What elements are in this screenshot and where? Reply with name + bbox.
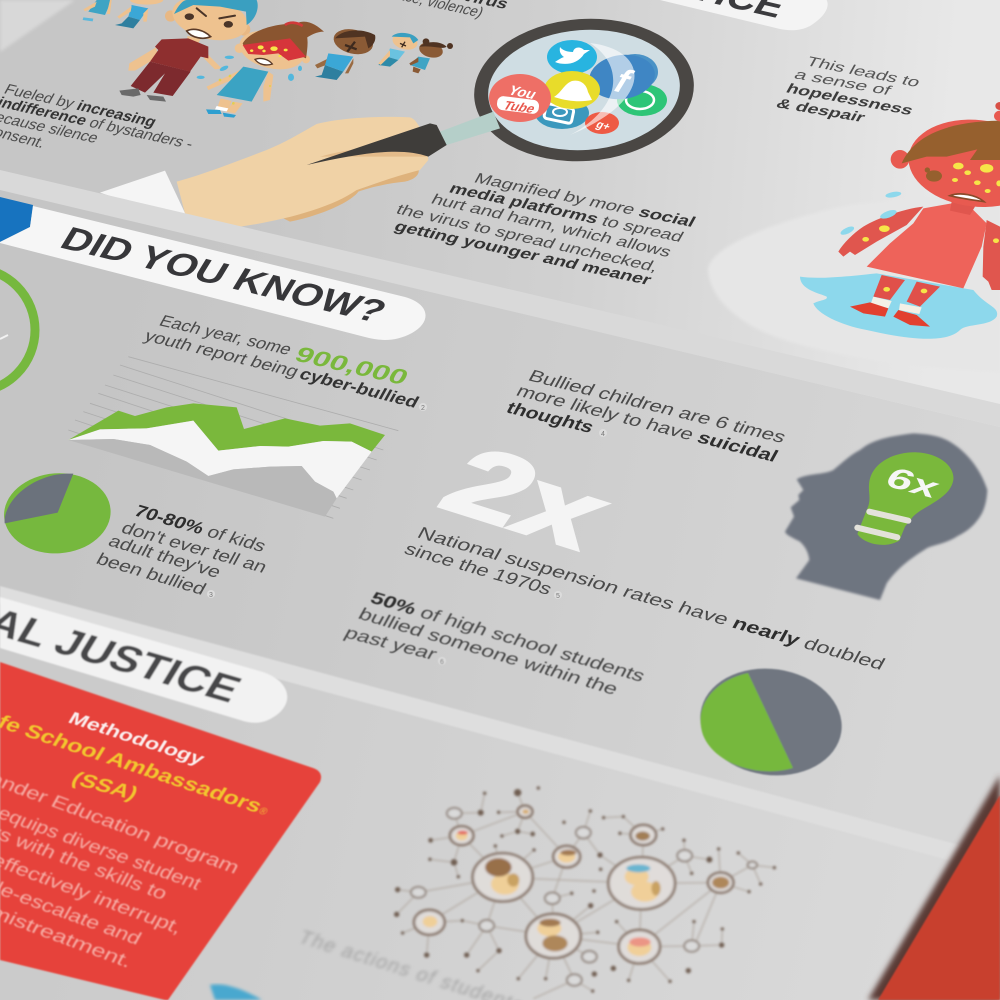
text: suspension rates [401, 523, 889, 673]
icon: light bulb [857, 452, 953, 545]
text: 70-80% of kids: don't ever tell an [118, 518, 271, 577]
text: magnified by social media [391, 170, 699, 288]
big number: 2x: 2x [422, 427, 632, 569]
icon: twitter [547, 40, 597, 74]
heading: did you know [0, 197, 426, 340]
text: 900,000 cyber-bullied [141, 312, 427, 412]
heading pill [0, 206, 426, 340]
heading: social justice (lower) [0, 570, 287, 723]
text: 50% of high school students: 50% of high school students [367, 588, 649, 685]
text: 50% of high school students: past year [341, 623, 441, 664]
text: 70-80% of kids [93, 502, 271, 599]
text: suicidal thoughts: 4 [601, 431, 605, 438]
label: 6x: 6x [879, 462, 947, 505]
chart: area chart [68, 357, 398, 518]
icon: magnifying glass with social media logos [469, 11, 699, 169]
icon: head with 6x light bulb [785, 433, 987, 600]
small child with buns [409, 38, 453, 73]
text: fueled by indifference: indifference of bystanders - [0, 95, 196, 152]
chart: green ring [0, 268, 35, 392]
text: hopelessness and despair: hopelessness [783, 81, 916, 118]
icon: snapchat [544, 71, 600, 109]
text: 900,000 cyber-bullied: 900,000 [290, 342, 413, 390]
social media halo shape behind sad girl [708, 190, 1000, 372]
illustration: sad red girl in puddle [800, 102, 1000, 339]
text: magnified by social media: the virus to spread unchecked, [393, 201, 661, 275]
chart: 50% pie [693, 660, 849, 784]
text: fueled by indifference: Fueled by increasing [1, 81, 159, 130]
text: hopelessness and despair [773, 54, 923, 125]
text: hopelessness and despair: This leads to [803, 54, 923, 90]
text: suspension rates: since the 1970s [401, 539, 556, 598]
puddle [800, 273, 997, 339]
text: 70-80% of kids: 70-80% of kids [131, 502, 269, 556]
illustration: small children top left [83, 0, 163, 28]
text: magnified by social media: hurt and harm, which allows [428, 191, 675, 260]
text: 50% of high school students: bullied someone within the [355, 605, 621, 699]
lens glint [570, 43, 635, 135]
icon: youtube: Tube [500, 100, 538, 117]
text: 70-80% of kids: adult they've [105, 531, 225, 581]
card title: ® [256, 806, 270, 818]
icon: youtube [489, 74, 551, 122]
chart: 70-80% pie [1, 470, 113, 557]
card title: Methodology [65, 709, 208, 769]
text: 70-80% of kids: been bullied [93, 549, 210, 598]
card title: (SSA) [67, 768, 142, 804]
icon: blue badge [0, 197, 33, 242]
text: 50% of high school students [341, 588, 649, 699]
text: DID YOU KNOW? [54, 220, 393, 330]
icon: whatsapp [617, 84, 667, 116]
text: 900,000 cyber-bullied: cyber-bullied [296, 364, 423, 411]
icon: youtube: You [505, 83, 539, 103]
text: magnified by social media: getting younger and meaner [391, 218, 655, 288]
illustration: smaller bystander children [315, 25, 453, 80]
red table surface [868, 775, 1000, 1000]
heading pill: social justice (top) [608, 0, 828, 30]
small child blue hair [378, 31, 419, 67]
text: suicidal thoughts [503, 366, 790, 466]
text: suspension rates: 5 [556, 593, 560, 600]
magnifier ring [469, 11, 699, 169]
illustration: hand holding magnifier [100, 112, 500, 227]
small child dark hair [315, 25, 376, 80]
panel: methodology red card [0, 662, 321, 1000]
icon: facebook [586, 51, 658, 103]
text: 900,000 cyber-bullied: Each year, some [156, 312, 295, 359]
divider band: lower section [0, 586, 1000, 874]
text: hopelessness and despair: & despair [773, 96, 869, 125]
icon: google plus [585, 112, 619, 134]
text: suicidal thoughts: thoughts [503, 399, 597, 437]
text: 50% of high school students: 6 [440, 659, 444, 666]
card body text [0, 752, 243, 972]
icon: facebook back [612, 54, 658, 90]
text: magnified by social media: Magnified by more social [471, 170, 699, 230]
text: magnified by social media: media platforms to spread [446, 180, 687, 245]
icon: instagram [535, 97, 589, 129]
crying girl [197, 22, 324, 118]
text: 900,000 cyber-bullied: 2 [421, 405, 425, 412]
illustration: bully boy and crying girl [119, 0, 324, 118]
illustration: network of students [394, 786, 776, 999]
card title [0, 702, 270, 818]
text: hopelessness and despair: a sense of [791, 66, 895, 98]
icon: facebook: f [607, 63, 639, 100]
icon: google plus: g+ [593, 119, 613, 133]
text: suicidal thoughts: more likely to have suicidal [513, 382, 781, 466]
divider band: top section [0, 170, 1000, 427]
text: 900,000 cyber-bullied: youth report being [141, 326, 303, 380]
big boy bully [119, 0, 258, 102]
icon: blue bird fragment [210, 984, 262, 1000]
text: 70-80% of kids: 3 [209, 592, 213, 599]
